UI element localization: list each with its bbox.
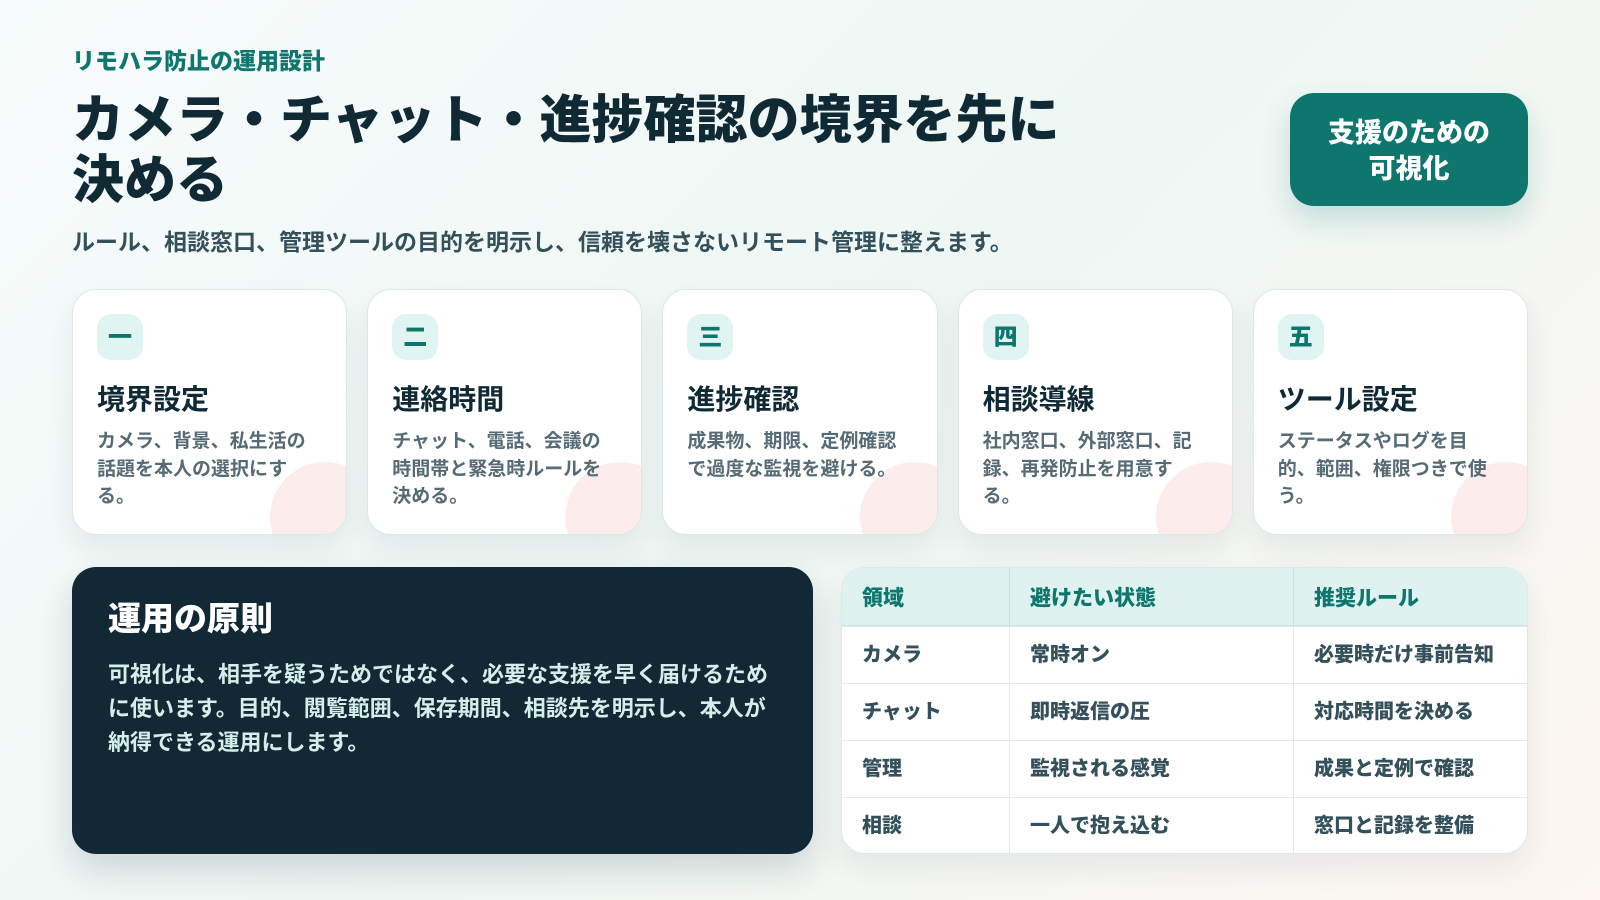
panel: card 1 (72, 289, 347, 535)
panel: card 2: 二 (403, 324, 427, 351)
row: camera: カメラ (862, 644, 922, 666)
row: camera: 常時オン (1030, 644, 1110, 666)
badge: 支援のための (1328, 118, 1490, 148)
panel: principles (72, 567, 813, 854)
panel: card 5 (1253, 289, 1528, 535)
row: chat: チャット (862, 700, 942, 722)
panel: card 4 (958, 289, 1233, 535)
panel: card 4: 相談導線 (983, 384, 1095, 415)
badge: 可視化 (1368, 154, 1450, 184)
panel: card 1: カメラ、背景、私生活の話題を本人の選択にする。 (97, 431, 306, 507)
panel: card 3: 進捗確認 (687, 384, 799, 415)
row: camera (842, 626, 1527, 682)
row: management (842, 740, 1527, 796)
row: management: 監視される感覚 (1030, 758, 1170, 780)
table header: 避けたい状態 (1030, 587, 1156, 610)
panel: card 3 (662, 289, 938, 535)
panel: card 5: ツール設定 (1278, 384, 1418, 415)
subtitle: ルール、相談窓口、管理ツールの目的を明示し、信頼を壊さないリモート管理に整えます。 (72, 229, 1013, 255)
panel: card 3: 三 (698, 324, 722, 351)
panel: card 2: 連絡時間 (392, 384, 504, 415)
table header (842, 568, 1527, 626)
panel: card 5: 五 (1289, 324, 1313, 351)
row: chat (842, 682, 1527, 740)
row: management: 成果と定例で確認 (1314, 758, 1474, 780)
principles heading: 運用の原則 (108, 600, 273, 637)
panel: card 3: 成果物、期限、定例確認で過度な監視を避ける。 (687, 431, 896, 480)
panel: card 4: 四 (994, 324, 1018, 351)
row: chat: 即時返信の圧 (1030, 700, 1150, 722)
badge (1290, 93, 1528, 206)
title: 決める (72, 152, 228, 210)
panel: card 1: 境界設定 (97, 384, 209, 415)
row: consultation: 相談 (862, 814, 902, 836)
row: consultation: 一人で抱え込む (1030, 814, 1170, 836)
panel: card 2 (367, 289, 642, 535)
row: consultation: 窓口と記録を整備 (1314, 814, 1474, 836)
table header: 推奨ルール (1314, 587, 1419, 610)
table header: 領域 (862, 587, 904, 610)
panel: card 5: ステータスやログを目的、範囲、権限つきで使う。 (1278, 431, 1487, 507)
principles text: 可視化は、相手を疑うためではなく、必要な支援を早く届けるために使います。目的、閲覧範囲、保存期間、相談先を明示し、本人が納得できる運用にします。 (108, 662, 768, 755)
panel: card 4: 社内窓口、外部窓口、記録、再発防止を用意する。 (983, 431, 1192, 507)
eyebrow: リモハラ防止の運用設計 (72, 48, 325, 74)
title (72, 92, 1059, 210)
row: management: 管理 (862, 758, 902, 780)
row: camera: 必要時だけ事前告知 (1314, 644, 1494, 666)
row: consultation (842, 796, 1527, 854)
panel: card 1: 一 (108, 324, 132, 351)
panel: card 2: チャット、電話、会議の時間帯と緊急時ルールを決める。 (392, 431, 601, 507)
title: カメラ・チャット・進捗確認の境界を先に (72, 92, 1059, 150)
table (841, 567, 1528, 854)
row: chat: 対応時間を決める (1314, 700, 1474, 722)
